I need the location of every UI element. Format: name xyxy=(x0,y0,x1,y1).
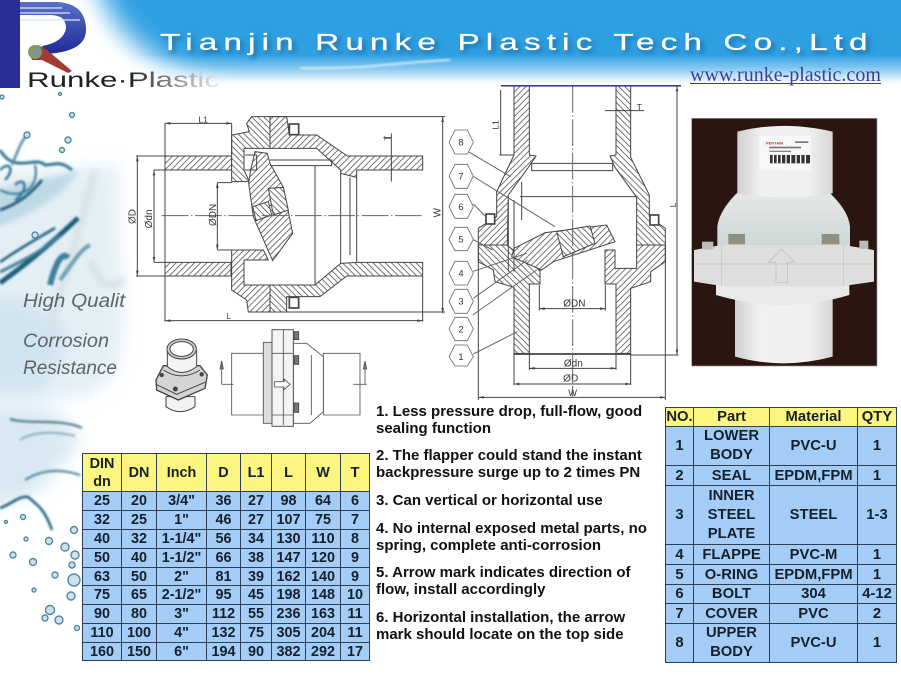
parts table: 1 xyxy=(873,468,881,484)
section drawing: vertical valve with part numbers xyxy=(449,86,678,400)
dimension table: 148 xyxy=(311,587,335,603)
feature notes: flow, install accordingly xyxy=(376,581,545,598)
dimension table: 55 xyxy=(248,606,264,622)
section drawing: horizontal valve cross section: L1 xyxy=(198,115,208,125)
dimension table: 45 xyxy=(248,587,264,603)
dimension table: 1-1/2" xyxy=(162,550,201,566)
dimension table: 150 xyxy=(127,644,151,660)
section drawing: horizontal valve cross section: L xyxy=(227,312,232,321)
parts table: 6 xyxy=(675,586,684,602)
parts table: PVC-M xyxy=(790,546,837,562)
feature notes xyxy=(376,403,647,643)
dimension table: 75 xyxy=(248,625,264,641)
parts table: PVC-U xyxy=(790,438,837,454)
dimension table: 32 xyxy=(94,512,110,528)
feature notes: 4. No internal exposed metal parts, no xyxy=(376,520,647,537)
parts table: 1 xyxy=(675,438,684,454)
dimension table: D xyxy=(218,464,229,480)
side labels: quality claims xyxy=(23,291,126,379)
dimension table: 50 xyxy=(131,568,147,584)
parts table: O-RING xyxy=(705,566,758,582)
dimension table: 6 xyxy=(351,493,359,509)
dimension table: 90 xyxy=(94,606,110,622)
product photo xyxy=(692,118,877,366)
section drawing: vertical valve with part numbers: T xyxy=(637,102,643,112)
feature notes: backpressure surge up to 2 times PN xyxy=(376,464,640,481)
section drawing: vertical valve with part numbers: L1 xyxy=(490,120,500,130)
section drawing: vertical valve with part numbers: 5 xyxy=(458,235,464,245)
dimension table: 130 xyxy=(276,531,300,547)
dimension table: 38 xyxy=(248,550,264,566)
parts table: 1-3 xyxy=(866,507,888,523)
section drawing: horizontal valve cross section: W xyxy=(433,207,444,217)
section drawing: horizontal valve cross section: ØD xyxy=(127,209,138,224)
dimension table: 112 xyxy=(212,606,235,622)
parts table: 7 xyxy=(675,606,684,622)
top blue edge line of vertical drawing xyxy=(501,85,681,87)
feature notes: 5. Arrow mark indicates direction of xyxy=(376,564,631,581)
section drawing: horizontal valve cross section: T xyxy=(384,136,393,141)
section drawing: horizontal valve cross section xyxy=(127,115,445,322)
dimension table: 7 xyxy=(351,512,359,528)
dimension table: 56 xyxy=(215,531,232,547)
dimension table: 81 xyxy=(215,568,232,584)
section drawing: horizontal valve cross section: ØDN xyxy=(208,204,219,226)
dimension table: 32 xyxy=(131,531,147,547)
dimension table: 147 xyxy=(276,550,300,566)
dimension table: 39 xyxy=(248,568,264,584)
product photo: PENTAIR xyxy=(766,140,783,145)
dimension table: W xyxy=(316,464,330,480)
dimension table: 1" xyxy=(174,512,189,528)
dimension table: L1 xyxy=(248,464,264,480)
dimension table: 11 xyxy=(347,625,363,641)
parts table: Part xyxy=(717,409,746,425)
dimension table: 10 xyxy=(347,587,363,603)
water splash background xyxy=(0,92,125,630)
parts table: COVER xyxy=(705,606,758,622)
section drawing: vertical valve with part numbers: ØDN xyxy=(563,299,585,310)
parts table: FLAPPE xyxy=(702,546,761,562)
feature notes: 1. Less pressure drop, full-flow, good xyxy=(376,403,642,420)
dimension table: 80 xyxy=(131,606,147,622)
parts table: BODY xyxy=(710,447,753,463)
parts table: 304 xyxy=(801,586,826,602)
dimension table: 20 xyxy=(131,493,147,509)
dimension table: L xyxy=(284,464,293,480)
dimension table: 382 xyxy=(276,644,300,660)
parts table: 1 xyxy=(873,546,881,562)
dimension table: 25 xyxy=(131,512,147,528)
dimension table: 2-1/2" xyxy=(162,587,201,603)
dimension table: 3" xyxy=(174,606,189,622)
dimension table: 100 xyxy=(127,625,151,641)
parts table: PVC-U xyxy=(790,635,837,651)
parts table: NO. xyxy=(666,409,693,425)
dimension table: 11 xyxy=(347,606,363,622)
feature notes: sealing function xyxy=(376,420,491,437)
section drawing: vertical valve with part numbers: 6 xyxy=(458,202,464,212)
dimension table: 65 xyxy=(131,587,147,603)
dimension table: Inch xyxy=(167,464,196,480)
dimension table: 75 xyxy=(94,587,110,603)
dimension table: 64 xyxy=(315,493,331,509)
parts table: 2 xyxy=(675,468,684,484)
parts table: 1 xyxy=(873,566,881,582)
dimension table: 107 xyxy=(276,512,300,528)
section drawing: vertical valve with part numbers: 8 xyxy=(458,138,464,148)
dimension table: 46 xyxy=(215,512,232,528)
parts table: STEEL xyxy=(790,507,837,523)
dimension table: 63 xyxy=(94,568,110,584)
dimension table: 4" xyxy=(174,625,189,641)
dimension table: 95 xyxy=(215,587,232,603)
dimension table: DIN xyxy=(90,456,114,472)
website link: www.runke-plastic.com xyxy=(690,64,881,86)
dimension table: 90 xyxy=(248,644,264,660)
parts table: QTY xyxy=(862,409,892,425)
dimension table: 6" xyxy=(174,644,189,660)
dimension table: 110 xyxy=(90,625,114,641)
dimension table: 120 xyxy=(311,550,335,566)
dimension table: 163 xyxy=(311,606,335,622)
section drawing: horizontal valve cross section: Ødn xyxy=(144,209,155,228)
feature notes: mark should locate on the top side xyxy=(376,626,624,643)
dimension table: T xyxy=(351,464,359,480)
dimension table: 25 xyxy=(94,493,110,509)
parts table: SEAL xyxy=(712,468,751,484)
logo: Runke Plastic: Runke·Plastic xyxy=(27,69,220,92)
feature notes: 3. Can vertical or horizontal use xyxy=(376,492,603,509)
feature notes: spring, complete anti-corrosion xyxy=(376,537,601,554)
parts table: BOLT xyxy=(712,586,751,602)
dimension table: 132 xyxy=(211,625,236,641)
dimension table: 162 xyxy=(276,568,300,584)
parts table: STEEL xyxy=(708,506,755,522)
dimension table: 236 xyxy=(276,606,300,622)
parts table: 4-12 xyxy=(862,586,892,602)
small 3D view of valve xyxy=(156,339,207,412)
title: company name: Tianjin Runke Plastic Tech Co.,Ltd xyxy=(160,30,868,56)
dimension table: dn xyxy=(93,474,111,490)
dimension table: 305 xyxy=(276,625,300,641)
parts table: BODY xyxy=(710,644,753,660)
parts table: UPPER xyxy=(706,625,757,641)
dimension table: 3/4" xyxy=(168,493,195,509)
dimension table: 36 xyxy=(215,493,232,509)
dimension table: 2" xyxy=(174,568,189,584)
section drawing: vertical valve with part numbers: 2 xyxy=(458,324,464,334)
dimension table: 160 xyxy=(90,644,114,660)
dimension table: 204 xyxy=(311,625,335,641)
parts table: 5 xyxy=(675,566,684,582)
dimension table: 140 xyxy=(311,568,335,584)
logo: Runke Plastic xyxy=(0,0,220,92)
dimension table: 40 xyxy=(94,531,110,547)
feature notes: 2. The flapper could stand the instant xyxy=(376,447,642,464)
side labels: quality claims: Corrosion xyxy=(23,331,109,352)
parts table: PVC xyxy=(798,606,829,622)
parts table: 1 xyxy=(873,438,881,454)
dimension table: 40 xyxy=(131,550,147,566)
parts table: INNER xyxy=(708,488,755,504)
dimension table xyxy=(82,453,370,661)
parts table: Material xyxy=(786,409,841,425)
dimension table: 292 xyxy=(311,644,335,660)
section drawing: vertical valve with part numbers: ØD xyxy=(563,374,578,385)
dimension table: 17 xyxy=(347,644,363,660)
parts table: 3 xyxy=(675,507,684,523)
small side view of valve xyxy=(220,330,367,426)
feature notes: 6. Horizontal installation, the arrow xyxy=(376,609,625,626)
section drawing: vertical valve with part numbers: W xyxy=(568,388,577,398)
dimension table: 27 xyxy=(248,512,264,528)
dimension table: 110 xyxy=(311,531,335,547)
section drawing: vertical valve with part numbers: L xyxy=(668,202,678,207)
section drawing: vertical valve with part numbers: 7 xyxy=(458,171,464,181)
parts table: LOWER xyxy=(704,428,759,444)
section drawing: vertical valve with part numbers: 1 xyxy=(458,352,464,362)
parts table xyxy=(665,407,897,663)
dimension table: 50 xyxy=(94,550,110,566)
dimension table: 8 xyxy=(351,531,359,547)
dimension table: 194 xyxy=(211,644,236,660)
parts table: EPDM,FPM xyxy=(774,468,853,484)
dimension table: 34 xyxy=(248,531,264,547)
parts table: PLATE xyxy=(708,526,755,542)
side labels: quality claims: Resistance xyxy=(23,358,117,379)
section drawing: vertical valve with part numbers: 3 xyxy=(458,297,464,307)
dimension table: 9 xyxy=(351,550,359,566)
section drawing: vertical valve with part numbers: Ødn xyxy=(564,359,583,370)
header banner xyxy=(0,0,901,100)
dimension table: 98 xyxy=(280,493,296,509)
parts table: 4 xyxy=(675,546,684,562)
parts table: 1 xyxy=(873,635,881,651)
parts table: 8 xyxy=(675,635,684,651)
section drawing: vertical valve with part numbers: 4 xyxy=(458,269,464,279)
parts table: 2 xyxy=(873,606,881,622)
dimension table: 27 xyxy=(248,493,264,509)
dimension table: 66 xyxy=(215,550,232,566)
dimension table: 1-1/4" xyxy=(162,531,201,547)
dimension table: 75 xyxy=(315,512,331,528)
parts table: EPDM,FPM xyxy=(774,566,853,582)
dimension table: 198 xyxy=(276,587,300,603)
side labels: quality claims: High Qualit xyxy=(23,291,126,312)
dimension table: 9 xyxy=(351,568,359,584)
dimension table: DN xyxy=(129,464,149,480)
